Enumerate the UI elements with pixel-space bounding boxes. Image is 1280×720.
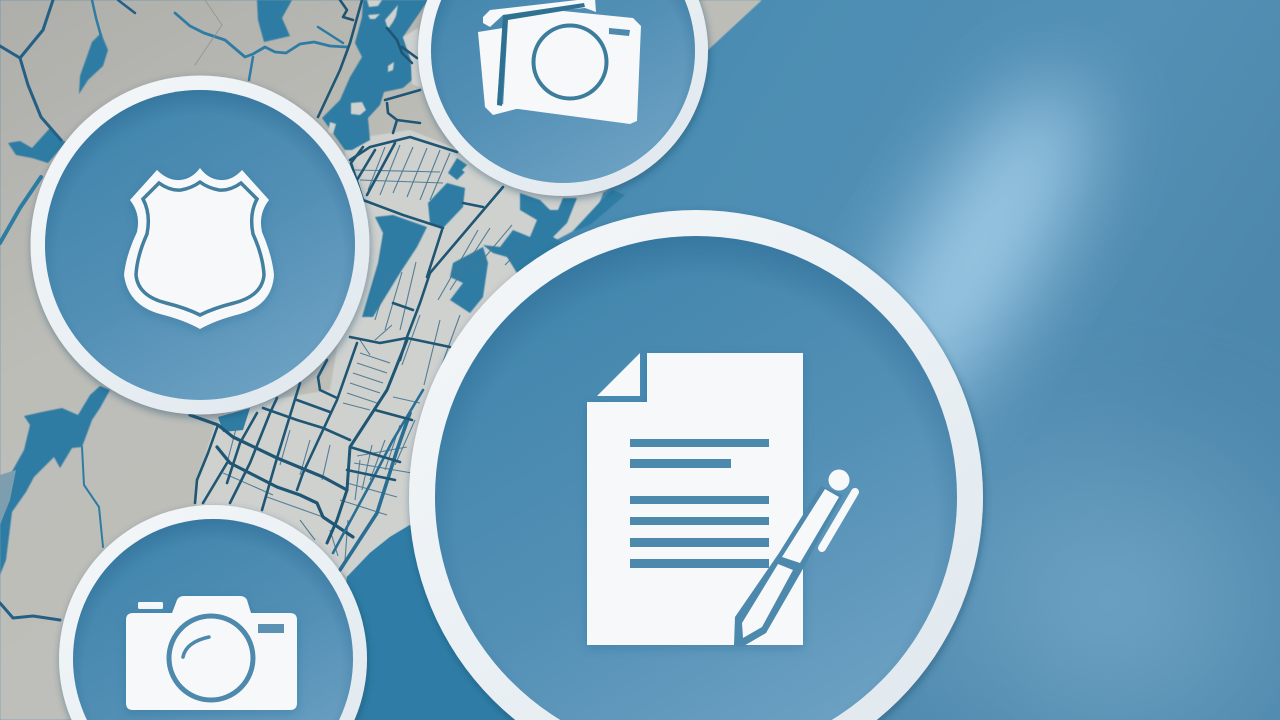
icon: document with pen [587,353,855,647]
background: deep water beside the peninsula tip [330,525,540,720]
icon: stacked photos [478,0,641,124]
map: rivers [0,0,347,620]
map: light city district [195,130,603,577]
badge: police shield [30,76,370,414]
map: land mass [0,0,762,720]
map: minor road grid [223,145,530,560]
badge: photographs [418,0,708,196]
map: lake by coast [218,408,250,432]
map: grey shoal [0,470,16,525]
icon: camera [126,596,297,710]
map: major roads [190,0,503,570]
icon: shield [124,168,274,329]
map: land islands over water [328,0,480,178]
badge: large document [409,210,983,720]
map: water bodies [0,0,625,575]
badge: camera [59,505,367,720]
background light rays [824,55,1260,720]
